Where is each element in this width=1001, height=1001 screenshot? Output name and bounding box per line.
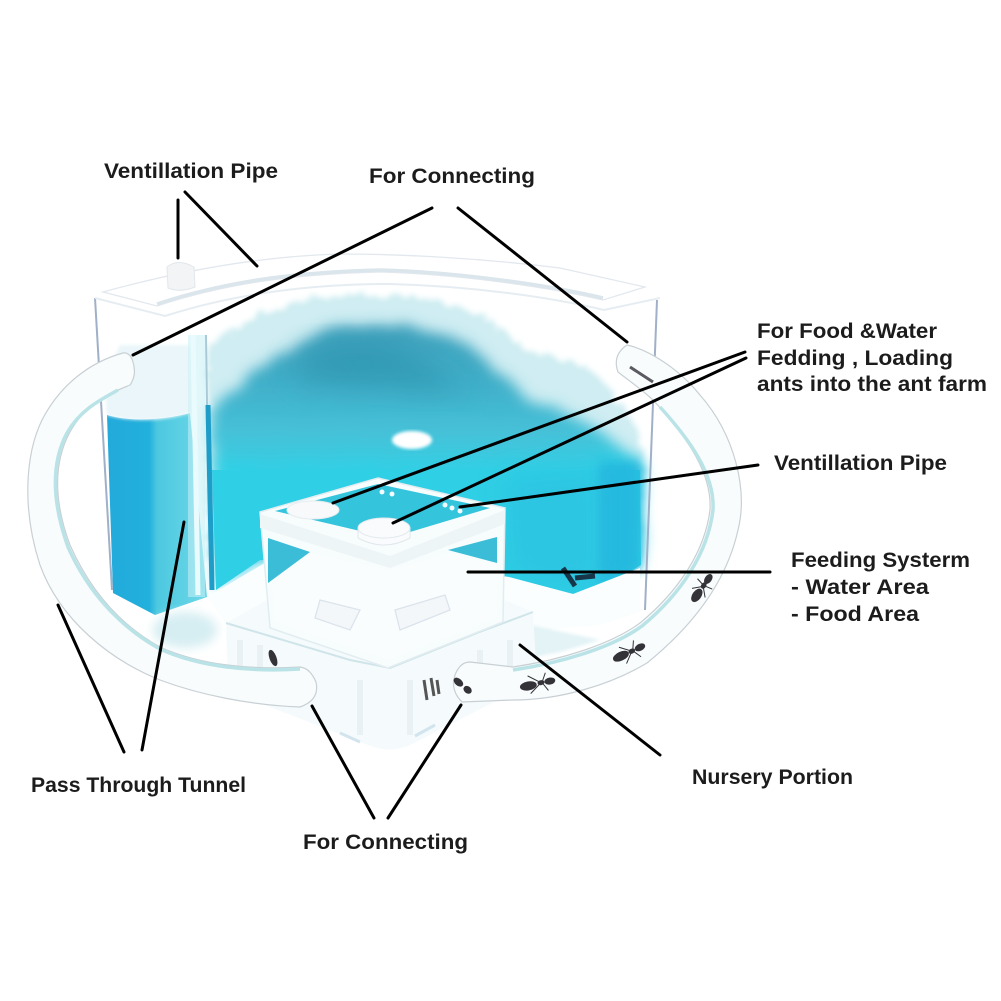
label: pass through tunnel: Pass Through Tunnel: [31, 774, 246, 797]
ants in gel: [563, 568, 595, 586]
side window left: [268, 538, 310, 583]
label: food and water feeding: Fedding , Loading: [757, 347, 953, 370]
blue gel: left chamber: [107, 413, 207, 615]
ants: [267, 568, 719, 700]
ant on lower right tunnel: [610, 637, 648, 668]
white ledge of tank floor: [153, 560, 640, 660]
glass pieces inside cube: [315, 595, 450, 630]
cap left: [287, 501, 339, 519]
label: for connecting top: For Connecting: [369, 165, 535, 188]
left tunnel section: [28, 353, 317, 707]
connector at top right: [630, 367, 653, 382]
label: feeding system: - Water Area: [791, 576, 929, 599]
cube lid rim: [260, 510, 505, 568]
leader lines: [58, 192, 770, 818]
divider column: [188, 335, 212, 597]
ant near connector: [519, 671, 556, 695]
label: food and water feeding: For Food &Water: [757, 320, 937, 343]
ants in base, centre: [424, 678, 439, 700]
label: feeding system: [791, 549, 970, 626]
label: nursery portion: Nursery Portion: [692, 766, 853, 789]
blue gel: main chamber: [208, 295, 643, 594]
right tunnel section: [454, 345, 741, 702]
label: for connecting bottom: For Connecting: [303, 831, 468, 854]
nursery base: [226, 598, 537, 750]
pass through tunnel: [28, 345, 741, 707]
label: feeding system: - Food Area: [791, 603, 919, 626]
feeding system cube: [260, 478, 505, 668]
label: ventillation pipe top: Ventillation Pipe: [104, 160, 278, 183]
white sand inside: [272, 553, 497, 660]
side window right: [448, 537, 497, 563]
label: food and water feeding: [757, 320, 987, 396]
ventilation nub: [167, 262, 195, 290]
lid: [95, 254, 660, 316]
label: ventillation pipe right: Ventillation Pipe: [774, 452, 947, 475]
ant in base, left: [267, 649, 279, 667]
cube top, blue showing through: [275, 484, 490, 538]
tank edges: [95, 298, 657, 610]
label: feeding system: Feeding Systerm: [791, 549, 970, 572]
vent holes: [380, 490, 462, 514]
cap front: [358, 518, 410, 545]
tank: [95, 254, 660, 615]
ant in connector: [453, 677, 473, 695]
white foam, top of left chamber: [104, 345, 192, 420]
label: food and water feeding: ants into the ant farm: [757, 373, 987, 396]
gel highlight: [392, 431, 432, 449]
ant on right tunnel: [685, 570, 719, 606]
